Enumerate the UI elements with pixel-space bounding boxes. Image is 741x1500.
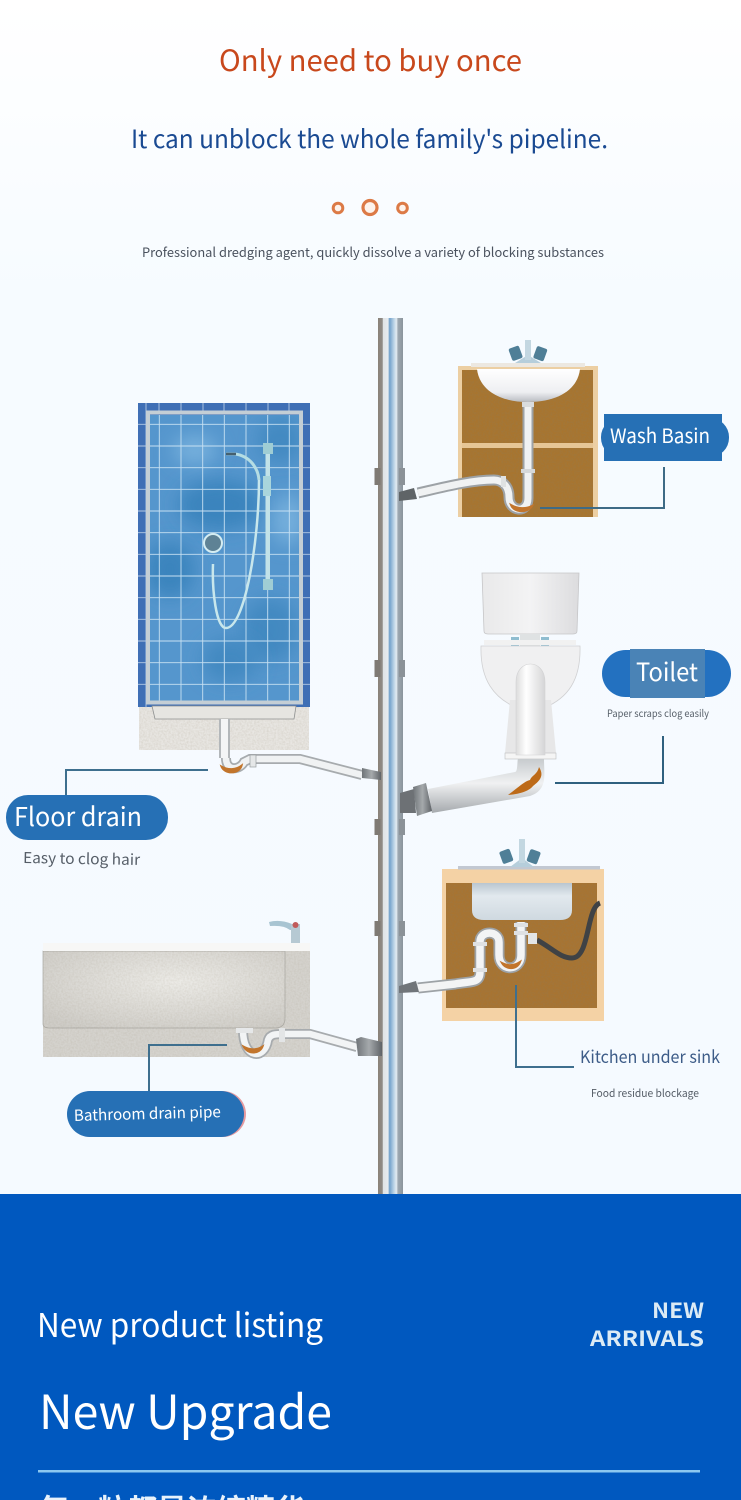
panel: blue footer	[0, 1194, 741, 1500]
heading: new product listing: New product listing	[37, 1299, 323, 1347]
illustration: shower	[138, 403, 381, 780]
tub tap	[269, 921, 300, 943]
kitchen sink bowl	[472, 883, 572, 920]
caption: paper scraps: Paper scraps clog easily	[607, 705, 710, 720]
kitchen tap	[499, 839, 541, 867]
label: floor drain: Floor drain	[14, 797, 142, 834]
shower tiles	[146, 411, 304, 705]
kitchen cabinet	[442, 866, 604, 1021]
illustration: wash basin cabinet	[399, 340, 598, 517]
subtitle: unblock pipeline: It can unblock the whole family's pipeline.	[131, 120, 608, 156]
label: bathroom drain pipe	[67, 1091, 246, 1137]
leader line: floor drain	[66, 770, 208, 796]
leader line: bathroom	[149, 1045, 227, 1091]
label: floor drain	[6, 795, 168, 840]
label: kitchen under sink: Kitchen under sink	[580, 1043, 721, 1068]
tub rim	[43, 943, 310, 951]
toilet tank	[482, 573, 579, 634]
label: wash basin	[601, 414, 729, 461]
basin pipe and trap	[399, 402, 535, 511]
illustration: kitchen sink cabinet	[399, 839, 604, 1021]
toilet hinges	[484, 634, 576, 646]
illustration: bathtub	[43, 921, 382, 1057]
label: toilet	[602, 649, 731, 698]
tub drain trap	[236, 1028, 382, 1056]
tub body	[43, 950, 310, 1057]
toilet bowl	[481, 646, 580, 708]
shower valve	[204, 534, 222, 552]
illustration: toilet	[400, 573, 580, 816]
label: toilet: Toilet	[636, 653, 699, 689]
icon: three orange rings	[333, 200, 407, 214]
cabinet	[458, 366, 598, 517]
shower drain trap	[221, 719, 381, 780]
caption: clog hair: Easy to clog hair	[23, 847, 140, 870]
toilet pedestal	[505, 700, 556, 753]
badge: new arrivals: NEW	[652, 1295, 704, 1325]
badge: new arrivals	[589, 1295, 704, 1353]
shower hose and head	[213, 454, 259, 628]
title: only need to buy once: Only need to buy once	[219, 38, 522, 80]
shower tray and base	[139, 706, 309, 750]
shower outer tile wall	[138, 403, 310, 707]
toilet front column	[516, 664, 545, 755]
basin tap	[508, 340, 548, 363]
kitchen black hose	[537, 903, 600, 958]
main vertical drain pipe	[374, 318, 405, 1194]
leader line: toilet	[555, 736, 663, 783]
shower rail	[263, 443, 273, 590]
basin bowl	[477, 369, 580, 402]
toilet waste pipe	[400, 759, 544, 816]
leader line: kitchen	[516, 985, 574, 1067]
shower metal frame	[148, 412, 301, 702]
tub inner panel	[43, 951, 285, 1028]
label: wash basin: Wash Basin	[610, 420, 710, 449]
leader line: wash basin	[540, 467, 664, 508]
page background	[0, 0, 741, 1194]
badge: new arrivals: ARRIVALS	[589, 1323, 704, 1353]
heading: new upgrade: New Upgrade	[39, 1374, 332, 1443]
kitchen waste pipes	[399, 922, 537, 993]
label: bathroom drain pipe: Bathroom drain pipe	[74, 1100, 221, 1126]
caption: food residue: Food residue blockage	[591, 1086, 699, 1101]
description text: Professional dredging agent, quickly dissolve a variety of blocking substances	[142, 242, 604, 261]
